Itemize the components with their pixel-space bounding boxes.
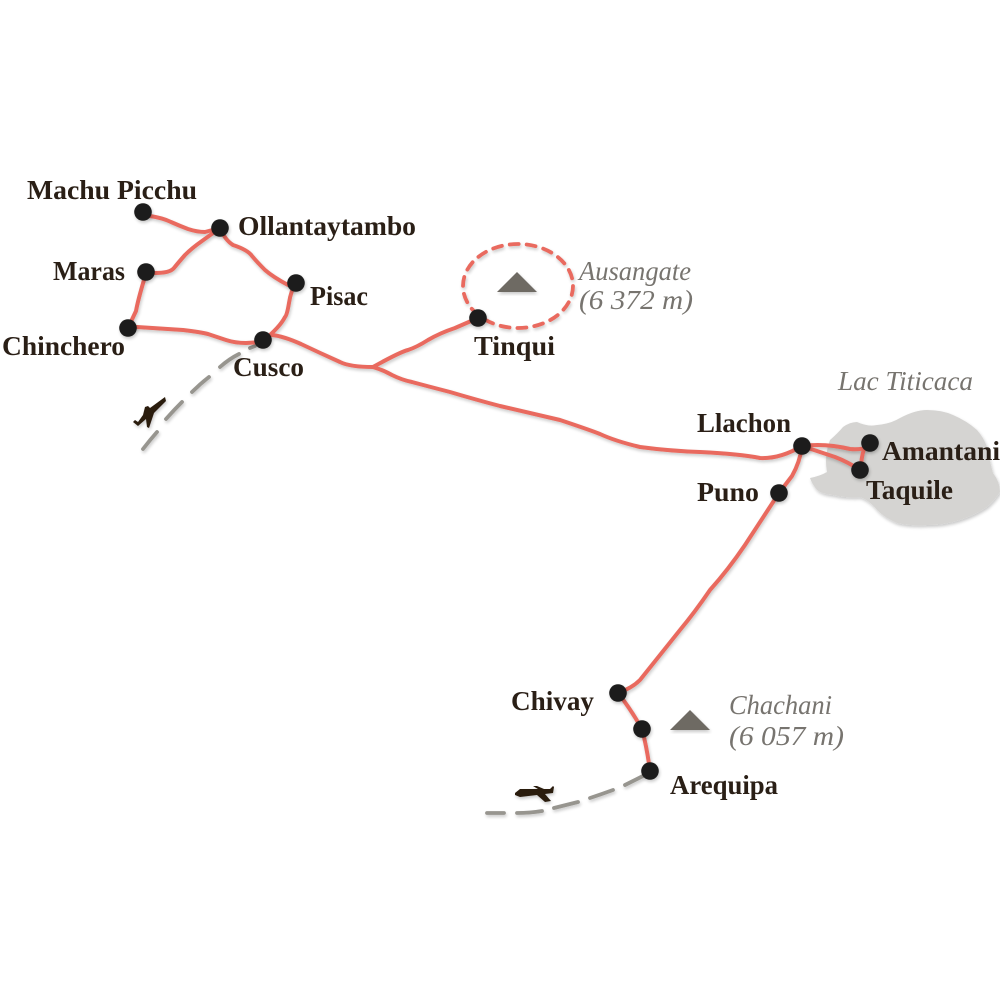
label: Ausangate altitude	[577, 256, 693, 315]
label: Chachani altitude: Chachani	[729, 690, 832, 720]
label: Ollantaytambo: Ollantaytambo	[238, 211, 416, 241]
route network	[128, 212, 870, 771]
stop: Llachon	[793, 437, 811, 455]
stop: Arequipa	[641, 762, 659, 780]
route: Machu Picchu to Ollantaytambo	[143, 212, 220, 232]
label: Chivay: Chivay	[511, 686, 594, 716]
stop: Chinchero	[119, 319, 137, 337]
route: Llachon to Taquile	[802, 446, 860, 470]
stop: Puno	[770, 484, 788, 502]
route: Puno to Chivay	[618, 493, 779, 693]
label: Tinqui: Tinqui	[474, 331, 556, 361]
label: Pisac: Pisac	[310, 281, 368, 311]
lake: Titicaca	[810, 410, 1000, 525]
label: Lac Titicaca: Lac Titicaca	[837, 366, 973, 396]
stop: Chivay	[609, 684, 627, 702]
route: junction to Tinqui	[373, 318, 478, 367]
route: Ollantaytambo to Pisac	[220, 228, 296, 285]
label: Chachani altitude	[729, 690, 844, 751]
label: Taquile: Taquile	[866, 475, 953, 505]
dashed flight path: Cusco	[143, 346, 255, 449]
route: Llachon to Amantani	[802, 445, 870, 449]
label: Arequipa: Arequipa	[670, 770, 778, 800]
mountain icon: Ausangate	[497, 272, 537, 292]
route: Cusco to junction	[272, 335, 373, 367]
route: Amantani to Taquile	[861, 449, 864, 470]
stop: Machu Picchu	[134, 203, 152, 221]
label: Ausangate altitude: Ausangate	[577, 256, 691, 286]
dashed flight path: Arequipa	[487, 776, 643, 813]
label: Ausangate altitude: (6 372 m)	[579, 285, 693, 315]
stop: between Chivay and Arequipa	[633, 720, 651, 738]
stop: Cusco	[254, 331, 272, 349]
stop: Ollantaytambo	[211, 219, 229, 237]
mountain icon: Chachani	[670, 710, 710, 730]
label: Chinchero: Chinchero	[2, 331, 125, 361]
stops	[119, 203, 879, 780]
stop: Maras	[137, 263, 155, 281]
route: junction to Llachon	[373, 367, 802, 458]
label: Cusco: Cusco	[233, 352, 304, 382]
label: Amantani: Amantani	[882, 436, 1000, 466]
stop: Tinqui	[469, 309, 487, 327]
route: Llachon to Puno	[779, 446, 802, 493]
route: Chivay to Arequipa	[618, 693, 650, 771]
dashed circle: Ausangate	[463, 244, 573, 328]
route: Maras to Chinchero	[128, 272, 146, 328]
label: Puno: Puno	[697, 477, 759, 507]
stop: Amantani	[861, 434, 879, 452]
label: Maras: Maras	[53, 256, 125, 286]
plane icon: Arequipa	[515, 786, 554, 802]
route: Pisac to Cusco	[263, 283, 296, 341]
stop: Pisac	[287, 274, 305, 292]
label: Machu Picchu: Machu Picchu	[27, 175, 197, 205]
label: Chachani altitude: (6 057 m)	[729, 721, 844, 751]
route: Maras to Ollantaytambo	[146, 228, 220, 273]
route: Chinchero to Cusco	[128, 327, 263, 343]
stop: Taquile	[851, 461, 869, 479]
plane icon: Cusco	[133, 397, 166, 428]
label: Llachon: Llachon	[697, 408, 791, 438]
